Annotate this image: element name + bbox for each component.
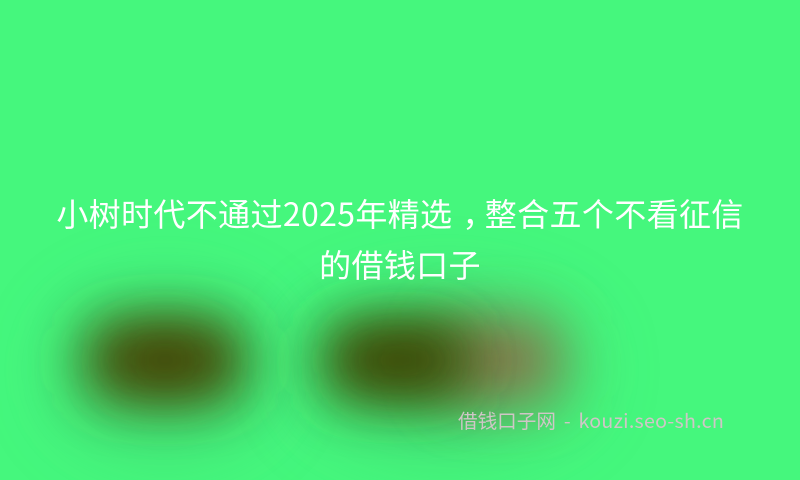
title: 的借钱口子 bbox=[319, 241, 481, 287]
watermark: 借钱口子网 - kouzi.seo-sh.cn bbox=[458, 405, 724, 434]
title bbox=[56, 190, 744, 287]
title: 小树时代不通过2025年精选 ，整合五个不看征信 bbox=[56, 190, 744, 236]
